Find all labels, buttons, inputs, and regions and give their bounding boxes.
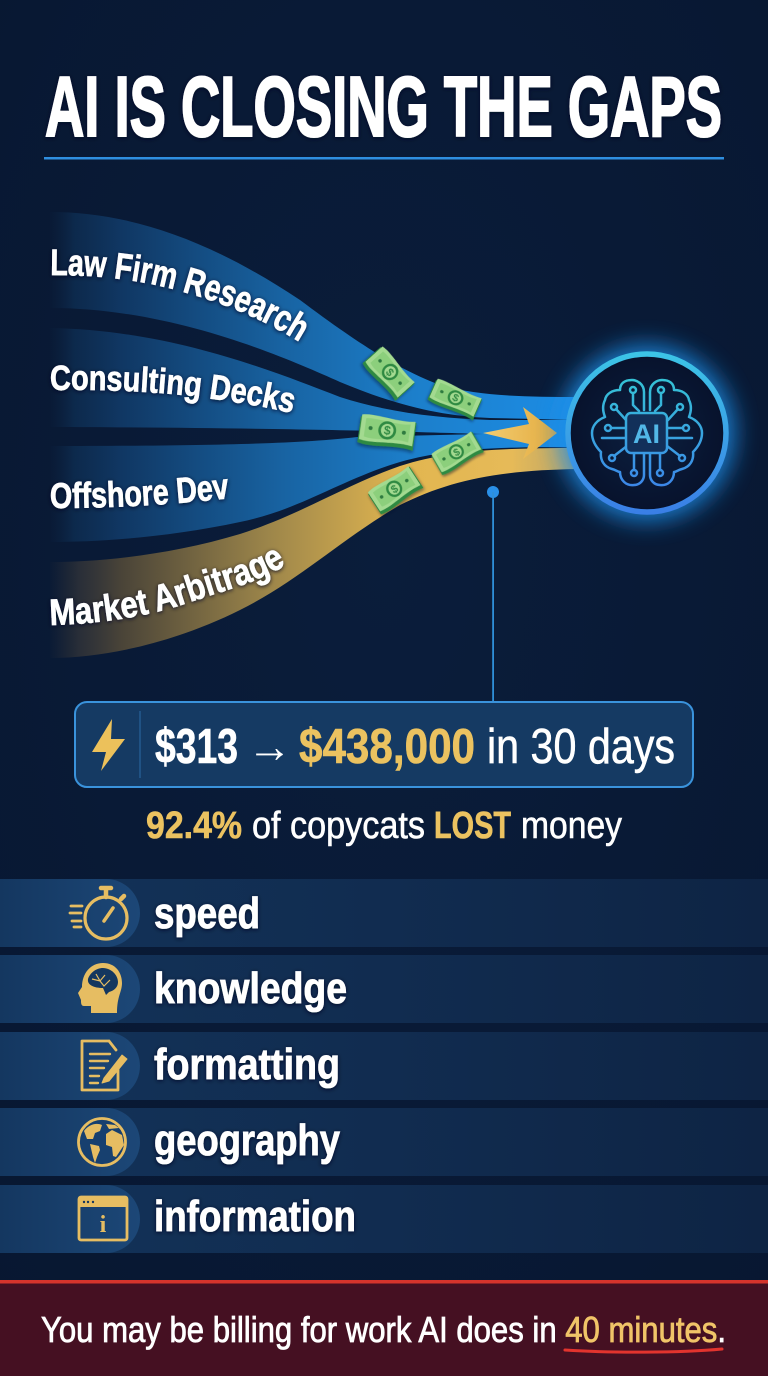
- stream: market arbitrage: [50, 448, 580, 658]
- text: geography: geography: [154, 1116, 340, 1165]
- copycats statement: [146, 805, 622, 847]
- row: information: [0, 1185, 768, 1253]
- stat box: [75, 702, 693, 787]
- label: law firm research: Law Firm Research: [51, 249, 310, 344]
- banknote 5: [367, 465, 424, 515]
- row: formatting: [0, 1032, 768, 1100]
- money: money: [521, 805, 622, 847]
- badge ring: [568, 354, 726, 512]
- row: speed: [0, 879, 768, 947]
- brain circuit icon: [592, 380, 702, 485]
- of copycats: of copycats: [252, 805, 425, 847]
- icon: head with brain: [78, 963, 122, 1013]
- box frame: [75, 702, 693, 787]
- stream: consulting decks: [50, 328, 580, 434]
- banknote 2: $: [450, 393, 460, 405]
- banknote 4: $: [452, 447, 462, 459]
- AI chip label: AI: [633, 419, 660, 449]
- icon: browser window with info sign: i: [100, 1212, 107, 1238]
- 92.4%: 92.4%: [146, 805, 242, 847]
- red underline: [565, 1349, 722, 1352]
- icon: browser window with info sign: [79, 1197, 127, 1240]
- banknote 3: $: [383, 424, 392, 438]
- banner text: You may be billing for work AI does in 40 minutes.: [41, 1309, 726, 1350]
- label: consulting decks: Consulting Decks: [50, 364, 297, 416]
- icon: lightning bolt: [92, 719, 125, 771]
- gold arrow: [483, 407, 557, 459]
- stat: in 30 days: in 30 days: [487, 720, 675, 774]
- icon: globe: [78, 1118, 126, 1166]
- label: offshore dev: Offshore Dev: [50, 476, 230, 512]
- banknote 3: [357, 413, 417, 451]
- arrow glyph: →: [247, 720, 292, 772]
- banknote 5: $: [389, 483, 401, 496]
- label: market arbitrage: Market Arbitrage: [50, 548, 286, 626]
- stream: law firm research: [50, 212, 580, 420]
- flow diagram: four streams converging: [50, 212, 574, 658]
- icon: document with pencil: [82, 1041, 127, 1090]
- row: geography: [0, 1108, 768, 1176]
- text: knowledge: knowledge: [154, 964, 347, 1013]
- stat: $313: $313: [155, 720, 238, 774]
- AI brain badge: [559, 345, 735, 521]
- connector line: [487, 486, 499, 702]
- banknote 2: [427, 378, 483, 421]
- title underline: [44, 157, 724, 160]
- text: formatting: formatting: [154, 1040, 340, 1089]
- text: information: information: [154, 1192, 356, 1241]
- LOST: LOST: [434, 805, 511, 847]
- row: knowledge: [0, 955, 768, 1023]
- stat: $438,000: $438,000: [299, 720, 475, 774]
- text: speed: speed: [154, 889, 260, 938]
- banknote 4: [430, 430, 484, 476]
- stream: offshore dev: [50, 434, 580, 542]
- banknote 1: [362, 345, 416, 401]
- badge glow: [559, 345, 735, 521]
- banknote 1: $: [383, 366, 396, 379]
- bottom banner: [0, 1280, 768, 1376]
- icon: stopwatch: [70, 888, 127, 939]
